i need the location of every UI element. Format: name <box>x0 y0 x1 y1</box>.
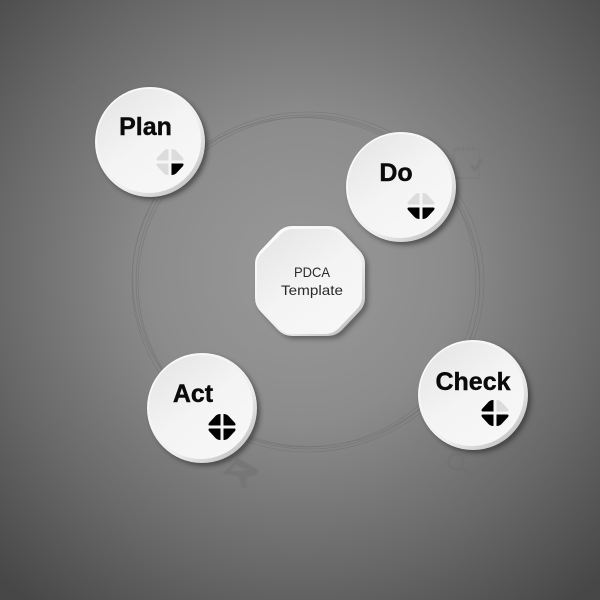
panel: center octagon <box>255 226 368 339</box>
panel: Check <box>418 340 531 453</box>
Act heading: Act <box>173 380 214 408</box>
ring: hand-drawn cycle circle <box>102 85 510 479</box>
icon: faint magnifier <box>448 454 473 477</box>
panel: Act <box>147 353 260 466</box>
icon: Plan quadrant marker <box>156 149 184 175</box>
Check heading: Check <box>435 368 511 396</box>
Plan heading: Plan <box>119 113 172 141</box>
Do heading: Do <box>379 159 413 187</box>
icon: faint cloud <box>72 81 104 99</box>
icon: faint megaphone arrow <box>222 458 259 488</box>
icon: faint notepad with check <box>454 146 482 178</box>
icon: Check quadrant marker <box>481 400 509 426</box>
panel: Do <box>346 132 459 245</box>
icon: Do quadrant marker <box>407 193 435 219</box>
panel: center octagon: Template <box>281 282 343 298</box>
icon: Act quadrant marker <box>208 414 236 440</box>
center label: PDCA <box>294 264 331 280</box>
panel: Plan <box>95 87 208 200</box>
